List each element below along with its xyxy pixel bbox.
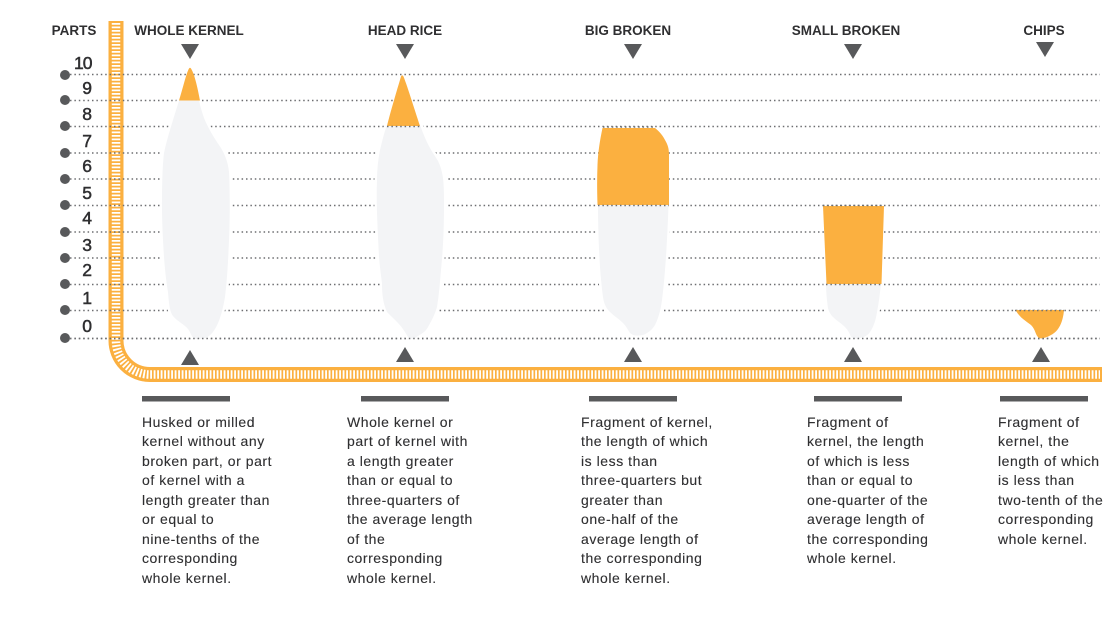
heading: BIG BROKEN: [585, 23, 671, 38]
kernel body: [162, 100, 230, 339]
description: is less than: [581, 453, 658, 469]
description: Husked or milled: [142, 414, 255, 430]
description: three-quarters but: [581, 472, 702, 488]
description: kernel, the: [998, 433, 1069, 449]
axis numbers: 9: [82, 78, 92, 98]
kernel fragment: [823, 206, 884, 284]
description: Fragment of kernel,: [581, 414, 713, 430]
heading: SMALL BROKEN: [792, 23, 900, 38]
description: part of kernel with: [347, 433, 468, 449]
heading: WHOLE KERNEL: [134, 23, 244, 38]
description: than or equal to: [807, 472, 913, 488]
description: three-quarters of: [347, 492, 460, 508]
description: kernel, the length: [807, 433, 924, 449]
axis numbers: 10: [74, 53, 93, 73]
axis numbers: 6: [82, 156, 92, 176]
bar: [361, 396, 449, 402]
axis numbers: 3: [82, 235, 92, 255]
top marker: [844, 44, 862, 59]
axis numbers: 0: [82, 316, 92, 336]
description: whole kernel.: [141, 570, 232, 586]
grid lines: [70, 74, 1100, 338]
kernel body: [377, 125, 444, 339]
description: [997, 414, 1103, 547]
bar: [589, 396, 677, 402]
axis numbers: 7: [82, 131, 92, 151]
column: whole kernel: [134, 23, 272, 586]
kernel fragment: [597, 128, 669, 205]
bottom marker: [844, 347, 862, 362]
description: whole kernel.: [806, 550, 897, 566]
bar: [814, 396, 902, 402]
axis numbers: 5: [82, 183, 92, 203]
kernel tip: [179, 68, 200, 100]
column: head rice: [346, 23, 473, 586]
description: two-tenth of the: [998, 492, 1103, 508]
bar: [1000, 396, 1088, 402]
description: average length of: [581, 531, 699, 547]
description: average length of: [807, 511, 925, 527]
description: kernel without any: [142, 433, 265, 449]
description: length of which: [998, 453, 1100, 469]
description: greater than: [581, 492, 663, 508]
description: one-quarter of the: [807, 492, 928, 508]
description: of the: [347, 531, 385, 547]
description: of kernel with a: [142, 472, 245, 488]
axis numbers: [74, 53, 93, 336]
bottom marker: [396, 347, 414, 362]
description: length greater than: [142, 492, 270, 508]
axis band: [116, 21, 1102, 374]
kernel fragment: [1016, 310, 1064, 338]
bar: [142, 396, 230, 402]
axis numbers: 2: [82, 260, 92, 280]
description: the corresponding: [807, 531, 928, 547]
top marker: [624, 44, 642, 59]
column: small broken: [792, 23, 928, 566]
description: [346, 414, 473, 586]
axis title: PARTS: [52, 23, 96, 38]
heading: HEAD RICE: [368, 23, 442, 38]
description: Fragment of: [998, 414, 1080, 430]
description: is less than: [998, 472, 1075, 488]
description: the length of which: [581, 433, 708, 449]
description: one-half of the: [581, 511, 679, 527]
description: corresponding: [142, 550, 238, 566]
top marker: [396, 44, 414, 59]
description: Fragment of: [807, 414, 889, 430]
heading: CHIPS: [1023, 23, 1065, 38]
kernel body: [598, 205, 668, 336]
column: big broken: [580, 23, 713, 586]
column: chips: [997, 23, 1103, 547]
description: whole kernel.: [580, 570, 671, 586]
axis numbers: 1: [82, 288, 92, 308]
description: broken part, or part: [142, 453, 272, 469]
description: [580, 414, 713, 586]
bottom marker: [1032, 347, 1050, 362]
description: the corresponding: [581, 550, 702, 566]
bottom marker: [181, 350, 199, 365]
top marker: [1036, 42, 1054, 57]
description: [141, 414, 272, 586]
description: corresponding: [347, 550, 443, 566]
kernel body: [826, 283, 881, 339]
description: whole kernel.: [346, 570, 437, 586]
axis numbers: 4: [82, 208, 92, 228]
axis dots: [60, 70, 70, 343]
description: than or equal to: [347, 472, 453, 488]
axis numbers: 8: [82, 104, 92, 124]
description: nine-tenths of the: [142, 531, 260, 547]
description: of which is less: [807, 453, 910, 469]
top marker: [181, 44, 199, 59]
bottom marker: [624, 347, 642, 362]
description: a length greater: [347, 453, 454, 469]
description: whole kernel.: [997, 531, 1088, 547]
description: Whole kernel or: [347, 414, 453, 430]
description: the average length: [347, 511, 473, 527]
description: or equal to: [142, 511, 214, 527]
description: [806, 414, 928, 566]
description: corresponding: [998, 511, 1094, 527]
kernel tip: [387, 75, 420, 126]
